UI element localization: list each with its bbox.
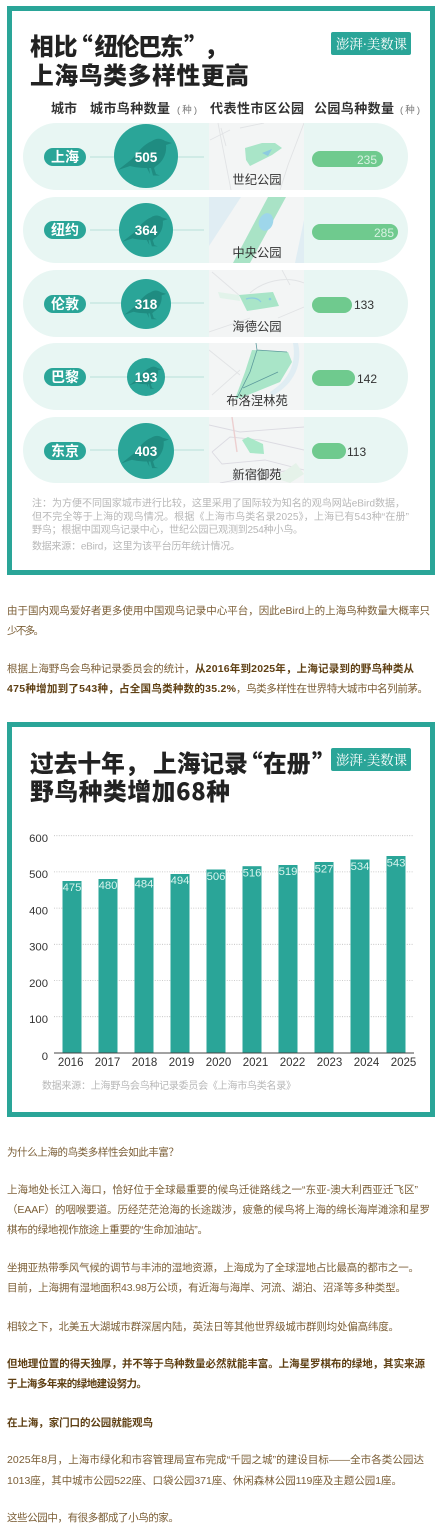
- row: New York: [23, 197, 408, 263]
- map: Hyde Park: 海德公园: [232, 319, 282, 334]
- map: Central Park: [209, 197, 304, 263]
- text block: thousand park city: 2025年8月，上海市绿化和市容管理局宣布完成“千园之城”的建设目标——全市各类公园达: [7, 1453, 424, 1466]
- y axis labels: 600: [29, 833, 48, 845]
- map: Shinjuku Gyoen: [209, 417, 304, 483]
- note and data source: [32, 496, 409, 552]
- y axis labels: 100: [29, 1014, 48, 1026]
- bar: Hyde Park 133: [312, 297, 374, 313]
- label: New York: [44, 221, 86, 239]
- x axis years: 2017: [95, 1057, 120, 1069]
- circle: Shanghai 505 species: [114, 124, 178, 188]
- y axis labels: 500: [29, 869, 48, 881]
- column headers: 代表性市区公园: [210, 101, 304, 116]
- text block: wetlands: 目前，上海拥有湿地面积43.98万公顷，有近海与海岸、河流、湖泊、沼泽等多种类型。: [7, 1281, 406, 1294]
- note and data source: 数据来源：eBird，这里为该平台历年统计情况。: [32, 540, 240, 552]
- bar: Bois de Boulogne 142: 142: [357, 372, 377, 386]
- y axis labels: 300: [29, 942, 48, 954]
- circle: London 318 species: [121, 279, 171, 329]
- panel: ten year species growth: [10, 724, 432, 1114]
- note and data source: 野鸟；根据中国观鸟记录中心，世纪公园已观测到254种小鸟。: [32, 523, 303, 536]
- column headers: 公园鸟种数量: [314, 101, 394, 116]
- bars: [62, 856, 406, 1053]
- row: London: [23, 270, 408, 337]
- text block: closing line: 这些公园中，有很多都成了小鸟的家。: [7, 1511, 179, 1524]
- title: species up by 68: 在册: [263, 745, 310, 779]
- data source: 数据来源：上海野鸟会鸟种记录委员会《上海市鸟类名录》: [42, 1079, 296, 1092]
- text block: species growth statistics: 475种增加到了543种，占全国鸟类种数的35.2%: [7, 682, 237, 695]
- title: species up by 68: 过去十年，: [30, 745, 148, 779]
- logo: The Paper data lesson: 澎湃·美数课: [336, 749, 408, 769]
- panel: city bird species comparison: [10, 8, 432, 572]
- text block: migration route: 棋布的绿地视作旅途上重要的“生命加油站”。: [7, 1223, 208, 1236]
- text block: wetlands: 坐拥亚热带季风气候的调节与丰沛的湿地资源，上海成为了全球湿地占比最高的都市之一。: [7, 1261, 419, 1274]
- bar values: 480: [99, 880, 117, 892]
- circle: Paris 193 species: [127, 358, 165, 396]
- text block: migration route: [7, 1183, 430, 1236]
- x axis years: 2019: [169, 1057, 194, 1069]
- bar values: 484: [135, 879, 153, 891]
- text block: comparison with other cities: 相较之下，北美五大湖城市群深居内陆，英法日等其他世界级城市群则均处偏高纬度。: [7, 1320, 399, 1333]
- text block: species growth statistics: [7, 662, 428, 695]
- title: species up by 68: [30, 745, 336, 807]
- column headers: (种): [400, 104, 420, 116]
- subheading: birdwatching in local parks: 在上海，家门口的公园就能观鸟: [7, 1416, 153, 1429]
- column headers: 城市鸟种数量: [90, 101, 170, 116]
- title: bird diversity comparison: [30, 28, 249, 91]
- text block: species growth statistics: 从2016年到2025年，上海记录到的野鸟种类从: [195, 662, 414, 675]
- label: Shanghai: [44, 148, 86, 166]
- map: Hyde Park: [209, 270, 304, 337]
- note and data source: 注：为方便不同国家城市进行比较，这里采用了国际较为知名的观鸟网站eBird数据，: [32, 496, 405, 510]
- bar: Central Park 285: [312, 224, 398, 240]
- label: Shanghai: 上海: [51, 149, 79, 165]
- column headers: 城市: [51, 101, 77, 116]
- bar values: 506: [207, 871, 225, 883]
- text block: migration route: 上海地处长江入海口，恰好位于全球最重要的候鸟迁徙路线之一“东亚-澳大利西亚迁飞区”: [7, 1183, 418, 1196]
- x axis years: 2016: [58, 1057, 83, 1069]
- row: Paris: [23, 343, 408, 410]
- bar values: 534: [351, 861, 369, 873]
- label: New York: 纽约: [51, 222, 79, 238]
- text block: green space effort: 但地理位置的得天独厚，并不等于鸟种数量必然就能丰富。上海星罗棋布的绿地，其实来源: [7, 1357, 426, 1370]
- label: Tokyo: [44, 442, 86, 460]
- x axis years: 2020: [206, 1057, 231, 1069]
- bar values: 543: [387, 858, 405, 870]
- text block: species growth statistics: 根据上海野鸟会鸟种记录委员会的统计，: [7, 662, 195, 675]
- x axis years: [58, 1057, 416, 1069]
- bar: Hyde Park 133: 133: [354, 298, 374, 312]
- map: Shinjuku Gyoen: 新宿御苑: [232, 467, 282, 482]
- bar values: 519: [279, 866, 297, 878]
- title: species up by 68: “: [239, 745, 263, 779]
- text block: species growth statistics: ，鸟类多样性在世界特大城市中名列前茅。: [236, 682, 428, 695]
- x axis years: 2022: [280, 1057, 305, 1069]
- circle: Tokyo 403 species: [118, 423, 174, 479]
- map: Century Park: [209, 123, 304, 190]
- title: species up by 68: ”: [312, 745, 336, 779]
- title: bird diversity comparison: ”: [184, 28, 208, 62]
- title: bird diversity comparison: 相比: [30, 28, 78, 62]
- bar values: [63, 858, 405, 894]
- column headers: [51, 101, 420, 116]
- bar chart: recorded species 2016 to 2025: [29, 833, 416, 1069]
- text block: green space effort: [7, 1357, 426, 1390]
- title: bird diversity comparison: ，: [204, 28, 228, 62]
- circle: New York 364 species: [119, 203, 173, 257]
- text block: why so diverse: 为什么上海的鸟类多样性会如此丰富？: [7, 1146, 179, 1158]
- circle: New York 364 species: 364: [135, 223, 158, 238]
- text block: migration route: （EAAF）的咽喉要道。历经茫茫沧海的长途跋涉，疲惫的候鸟将上海的绵长海岸滩涂和星罗: [7, 1203, 430, 1216]
- bar: Shinjuku Gyoen 113: 113: [347, 445, 366, 459]
- bar values: 494: [171, 875, 189, 887]
- x axis years: 2025: [391, 1057, 416, 1069]
- bar values: 516: [243, 868, 261, 880]
- bar: Shinjuku Gyoen 113: [312, 443, 366, 459]
- circle: Paris 193 species: 193: [135, 370, 158, 385]
- title: bird diversity comparison: 上海鸟类多样性更高: [30, 57, 249, 91]
- bar values: 527: [315, 864, 333, 876]
- bar: Century Park 235: 235: [357, 153, 377, 167]
- y axis labels: 0: [42, 1051, 48, 1063]
- label: London: [44, 295, 86, 313]
- label: Tokyo: 东京: [51, 443, 79, 459]
- map: Bois de Boulogne: 布洛涅林苑: [226, 393, 288, 408]
- circle: Tokyo 403 species: 403: [135, 444, 158, 459]
- bar: Bois de Boulogne 142: [312, 370, 377, 386]
- text block: eBird note: [7, 604, 430, 637]
- note and data source: 但不完全等于上海的观鸟情况。根据《上海市鸟类名录2025》，上海已有543种“在册”: [32, 510, 409, 523]
- text block: wetlands: [7, 1261, 419, 1294]
- x axis years: 2021: [243, 1057, 268, 1069]
- title: species up by 68: 上海记录: [153, 745, 248, 779]
- circle: London 318 species: 318: [135, 297, 158, 312]
- x axis years: 2018: [132, 1057, 157, 1069]
- bar: Century Park 235: [312, 151, 383, 167]
- y axis labels: [29, 833, 48, 1063]
- map: Bois de Boulogne: [209, 343, 304, 410]
- bar values: 475: [63, 882, 81, 894]
- y axis labels: 400: [29, 906, 48, 918]
- map: Central Park: 中央公园: [232, 245, 282, 260]
- text block: thousand park city: 1013座，其中城市公园522座、口袋公园371座、休闲森林公园119座及主题公园1座。: [7, 1474, 402, 1487]
- row: Tokyo: [23, 417, 408, 483]
- label: Paris: 巴黎: [51, 369, 79, 385]
- text block: green space effort: 于上海多年来的绿地建设努力。: [7, 1377, 147, 1390]
- logo: The Paper data lesson: 澎湃·美数课: [336, 33, 408, 53]
- row: Shanghai: [23, 123, 408, 190]
- text block: thousand park city: [7, 1453, 424, 1487]
- label: Paris: [44, 368, 86, 386]
- text block: eBird note: 由于国内观鸟爱好者更多使用中国观鸟记录中心平台，因此eBird上的上海鸟种数量大概率只: [7, 604, 430, 617]
- title: bird diversity comparison: “: [69, 28, 93, 62]
- x axis years: 2024: [354, 1057, 380, 1069]
- y axis labels: 200: [29, 978, 48, 990]
- label: London: 伦敦: [51, 296, 79, 312]
- title: species up by 68: 野鸟种类增加68种: [30, 773, 230, 807]
- text block: eBird note: 少不多。: [7, 624, 44, 637]
- map: Century Park: 世纪公园: [232, 173, 282, 187]
- x axis years: 2023: [317, 1057, 342, 1069]
- column headers: (种): [177, 104, 197, 116]
- circle: Shanghai 505 species: 505: [135, 150, 158, 165]
- title: bird diversity comparison: 纽伦巴东: [94, 28, 184, 62]
- bar: Central Park 285: 285: [374, 226, 394, 240]
